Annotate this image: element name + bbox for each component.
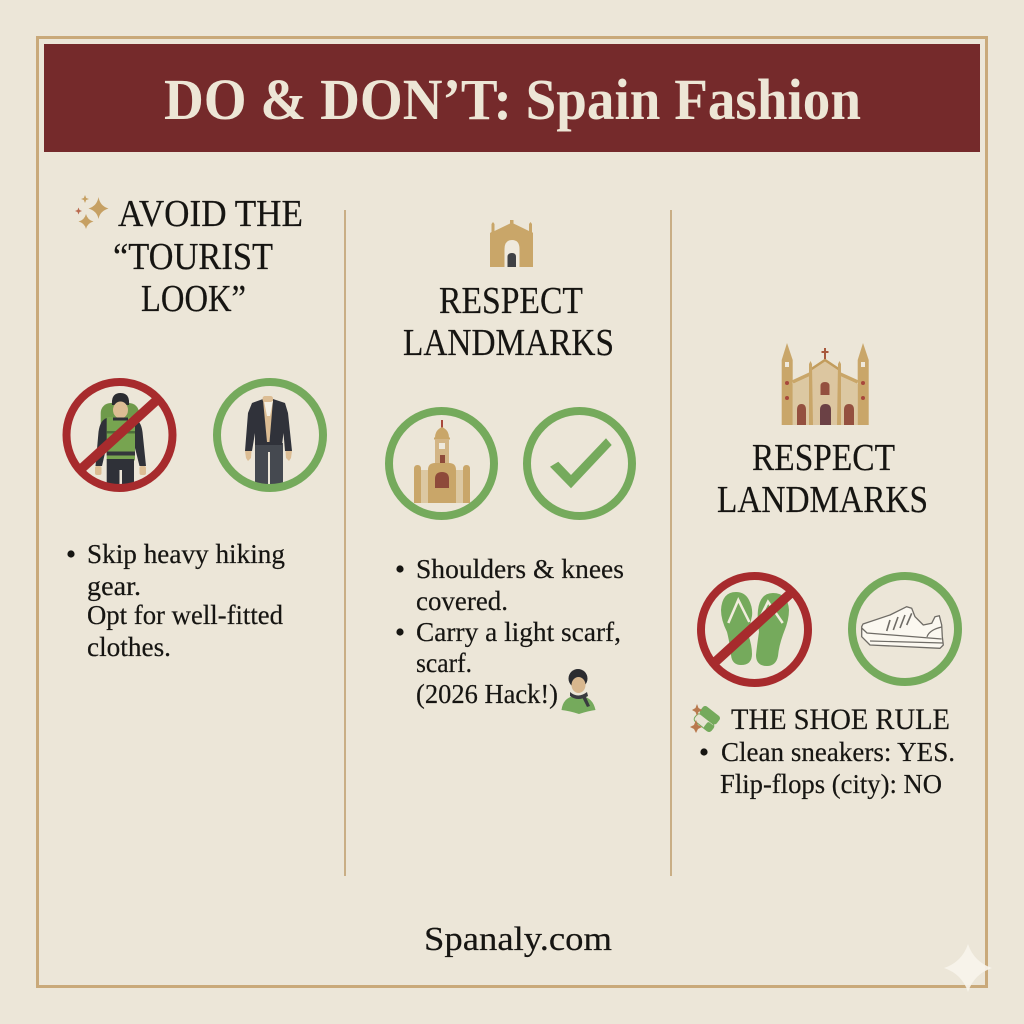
title: DO & DON’T: Spain Fashion [164, 67, 861, 132]
heading: respect landmarks: LANDMARKS [403, 322, 614, 364]
icon: church in green circle [389, 411, 494, 516]
heading: avoid the tourist look: LOOK” [141, 278, 246, 320]
bullet list: shoes: Clean sneakers: YES. [721, 736, 955, 767]
panel: respect landmarks (dress) [389, 220, 632, 714]
heading: respect landmarks [403, 280, 614, 364]
heading: avoid the tourist look: “TOURIST [113, 236, 273, 278]
bullet list: landmarks dress code: (2026 Hack!) [416, 678, 558, 709]
heading: respect landmarks: LANDMARKS [717, 479, 928, 521]
icon: well-fitted suit [217, 382, 323, 488]
icon: large church [782, 343, 869, 425]
heading: avoid the tourist look [113, 193, 303, 320]
bullet list: landmarks dress code [396, 553, 624, 709]
title banner [44, 44, 980, 152]
footer: site name: Spanaly.com [424, 921, 612, 958]
bullet list: tourist look: gear. [87, 570, 141, 601]
bullet list: landmarks dress code: Shoulders & knees [416, 553, 624, 584]
bullet list: landmarks dress code: scarf. [416, 647, 472, 678]
bullet list: landmarks dress code: Carry a light scarf, [416, 616, 621, 647]
panel: avoid the tourist look [66, 193, 323, 662]
heading: avoid the tourist look: AVOID THE [118, 193, 303, 235]
icon: arch building [490, 220, 533, 267]
icon: person with scarf [562, 669, 596, 714]
bullet list: landmarks dress code: covered. [416, 585, 508, 616]
icon: sparkles [75, 195, 108, 229]
icon: green check mark [527, 411, 632, 516]
icon: corner sparkle [944, 944, 992, 992]
icon: hiker prohibited [66, 382, 172, 489]
heading: respect landmarks [717, 437, 928, 521]
heading: respect landmarks: RESPECT [752, 437, 895, 479]
bullet list: tourist look [67, 538, 285, 662]
bullet list: shoes [700, 736, 955, 799]
bullet list: tourist look: Opt for well-fitted [87, 599, 283, 630]
icon: flip-flops prohibited [701, 576, 808, 683]
bullet list: tourist look: clothes. [87, 631, 171, 662]
subheading: the shoe rule: THE SHOE RULE [731, 703, 950, 736]
icon: small shoe and sparkles [690, 704, 721, 733]
icon: clean sneaker [852, 576, 958, 682]
bullet list: tourist look: Skip heavy hiking [87, 538, 285, 569]
bullet list: shoes: Flip-flops (city): NO [720, 768, 942, 799]
heading: respect landmarks: RESPECT [439, 280, 583, 322]
panel: the shoe rule [690, 343, 958, 799]
